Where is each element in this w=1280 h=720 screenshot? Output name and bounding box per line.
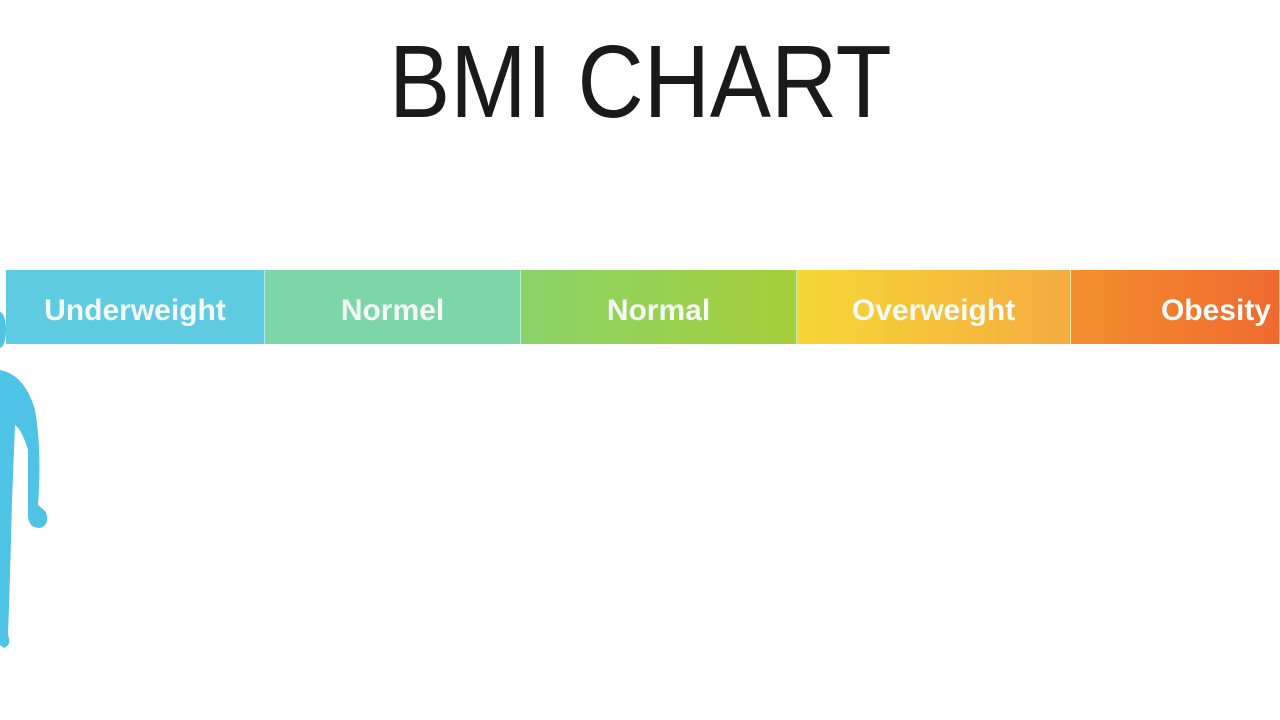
segment: underweight: Underweight: [44, 294, 226, 327]
segment: obesity: [1071, 270, 1280, 344]
segment: normal 2: Normal: [607, 294, 710, 327]
icon: human figure: [0, 312, 48, 648]
title: BMI CHART: [389, 24, 891, 139]
segment: normal 1: Normel: [341, 294, 444, 327]
segment: normal 2: [521, 270, 797, 344]
segment: normal 1: [265, 270, 521, 344]
segment: overweight: [797, 270, 1071, 344]
segment: underweight: [6, 270, 265, 344]
segment: obesity: Obesity: [1161, 294, 1271, 327]
bmi bar: [6, 270, 1280, 344]
segment: overweight: Overweight: [852, 294, 1015, 327]
